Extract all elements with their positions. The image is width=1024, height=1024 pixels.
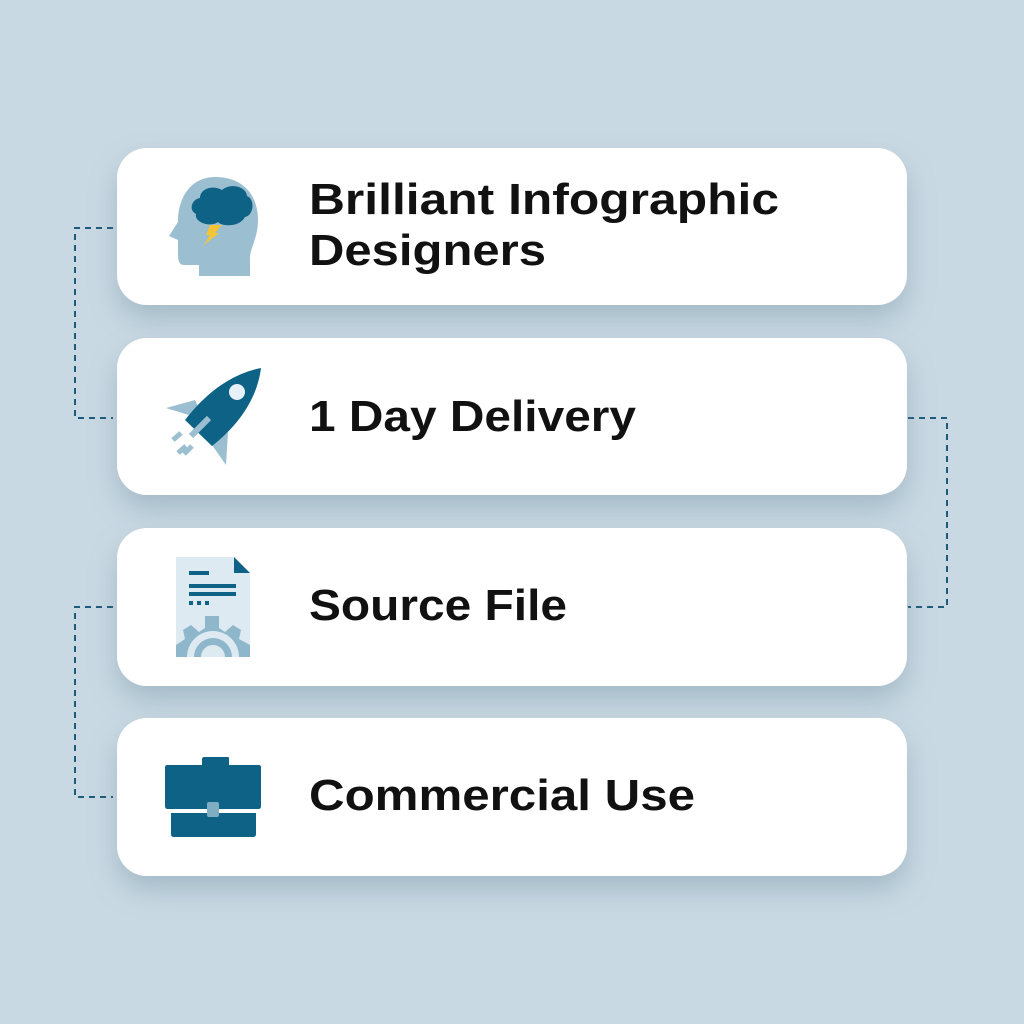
card: delivery [117,338,907,495]
text: title 1: Designers [309,226,546,275]
icon: document with gear [176,557,250,657]
connector: card2 to card3 [908,418,947,607]
icon: rocket [166,368,261,465]
text: title 3: Source File [309,581,567,630]
text: title 4: Commercial Use [309,771,695,820]
icon: head with storm cloud [169,177,258,276]
card: source file [117,528,907,686]
text: title 1 [309,175,779,275]
text: title 2: 1 Day Delivery [309,392,637,441]
card: designers [117,148,907,305]
connector: card1 to card2 [75,228,113,418]
icon: briefcase [165,757,261,837]
text: title 1: Brilliant Infographic [309,175,779,224]
card: commercial use [117,718,907,876]
connector: card3 to card4 [75,607,113,797]
